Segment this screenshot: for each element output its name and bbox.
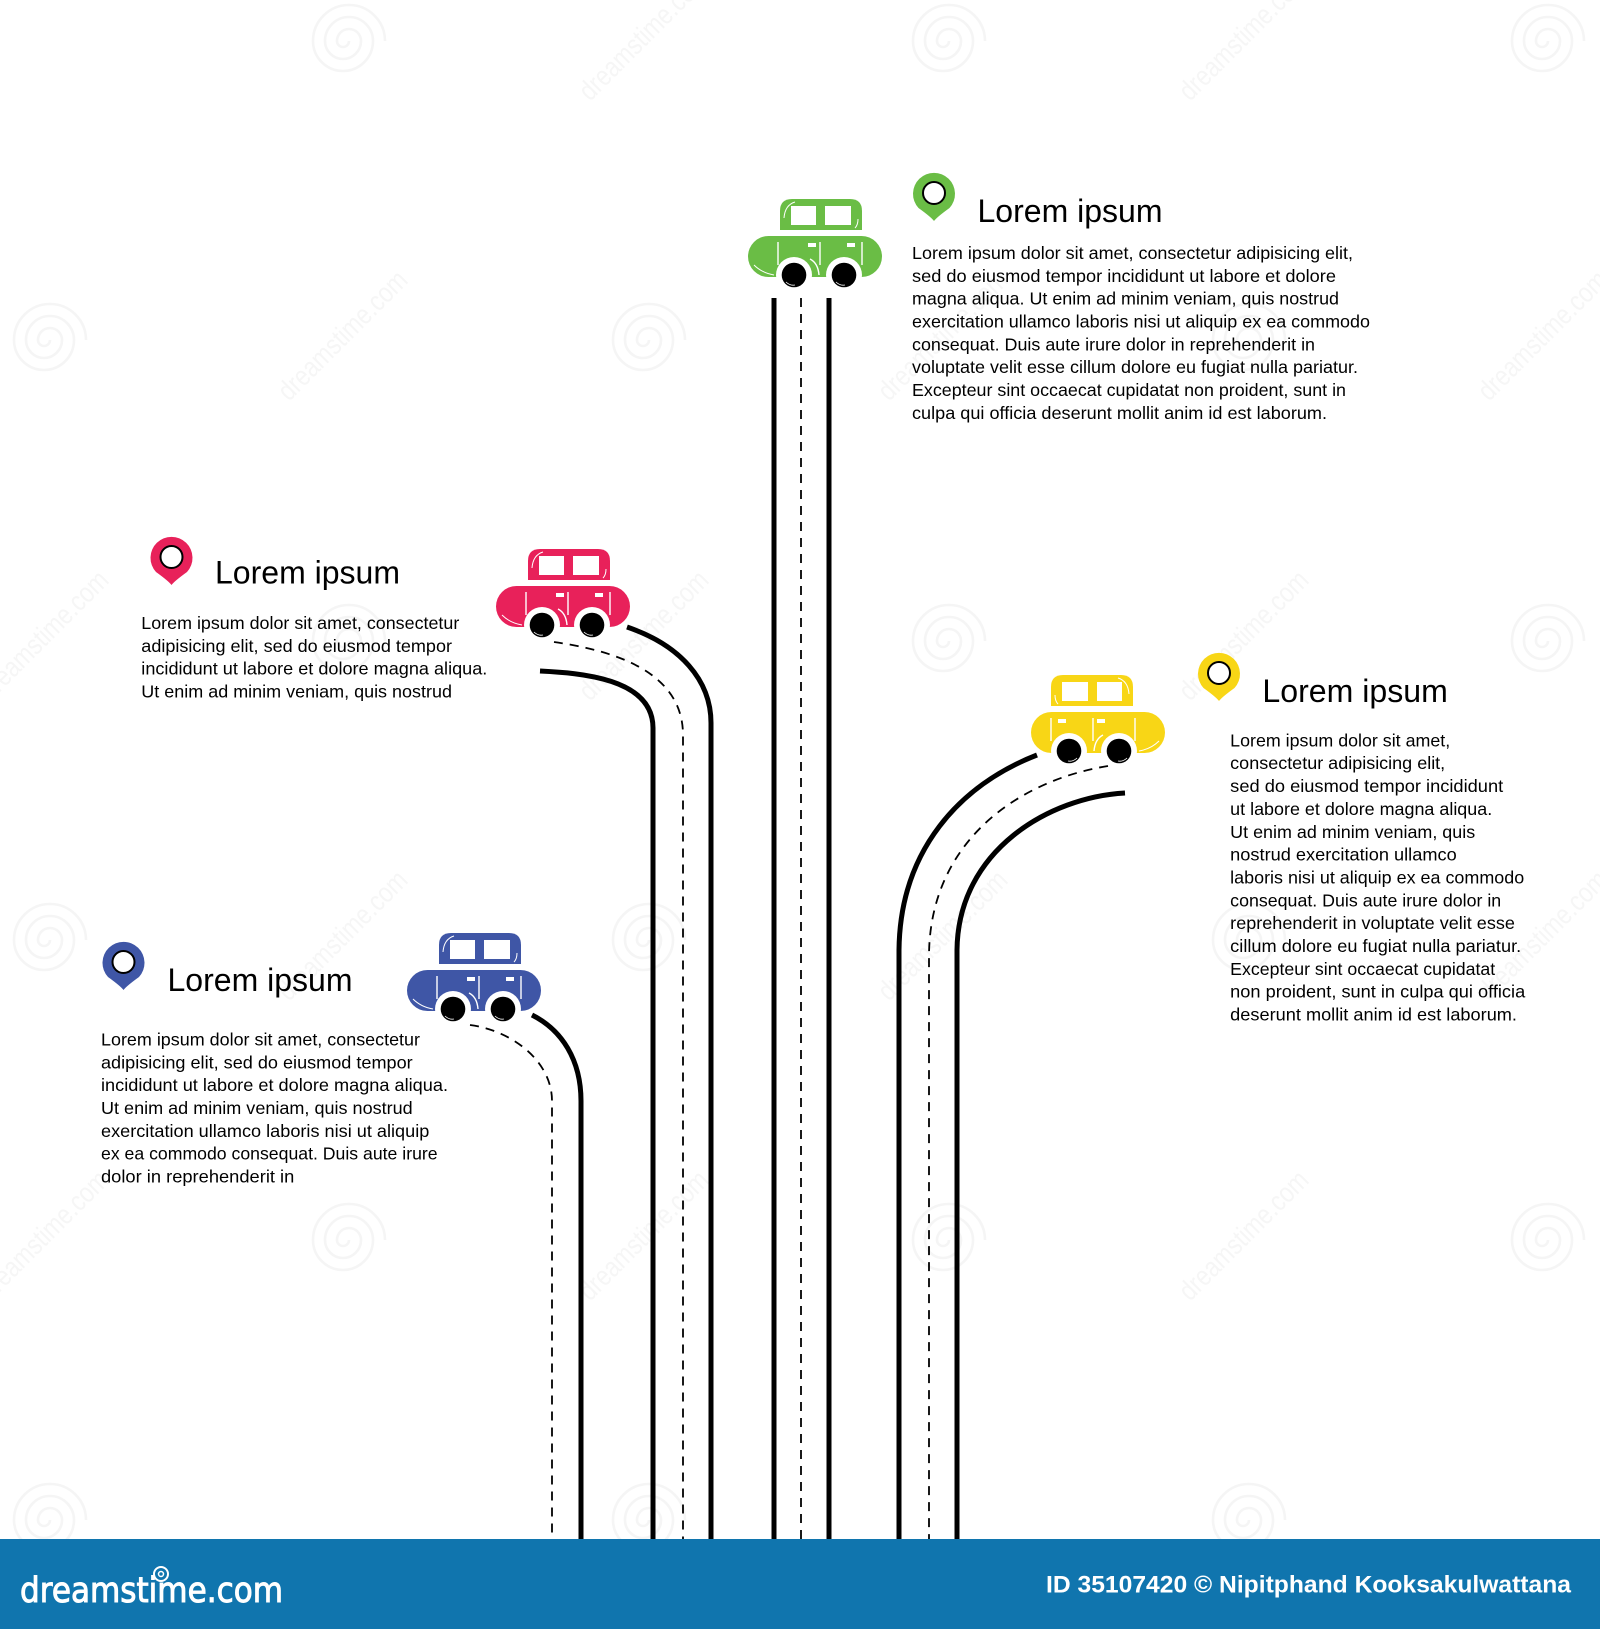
panel: green text block: [912, 173, 1370, 423]
logo: dreamstime.com: dreamstime.com: [20, 1571, 283, 1611]
icon: yellow map pin: [1198, 653, 1240, 701]
heading: blue: Lorem ipsum: [168, 962, 352, 998]
road: green centre branch: [774, 298, 829, 1539]
text block: green: [912, 243, 1370, 423]
image credit: ID 35107420 © Nipitphand Kooksakulwattana: [1046, 1572, 1571, 1598]
text block: yellow: Ut enim ad minim veniam, quis: [1230, 822, 1475, 842]
panel: yellow text block: [1198, 653, 1525, 1025]
road: yellow branch: [899, 755, 1125, 1539]
panel: blue text block: [101, 942, 448, 1187]
text block: green: sed do eiusmod tempor incididunt ut labore et dolore: [912, 266, 1336, 286]
text block: green: exercitation ullamco laboris nisi ut aliquip ex ea commodo: [912, 312, 1370, 332]
text block: yellow: nostrud exercitation ullamco: [1230, 845, 1457, 865]
text block: yellow: cillum dolore eu fugiat nulla pariatur.: [1230, 936, 1521, 956]
text block: yellow: consequat. Duis aute irure dolor in: [1230, 890, 1501, 910]
text block: red: adipisicing elit, sed do eiusmod tempor: [141, 636, 452, 656]
icon: blue map pin: [102, 942, 144, 990]
text block: yellow: Excepteur sint occaecat cupidatat: [1230, 959, 1495, 979]
icon: red map pin: [150, 537, 192, 585]
heading: green: Lorem ipsum: [978, 193, 1162, 229]
icon: green map pin: [913, 173, 955, 221]
text block: blue: Ut enim ad minim veniam, quis nostrud: [101, 1098, 413, 1118]
text block: blue: [101, 1030, 448, 1187]
car: red: [496, 549, 630, 643]
text: dreamstime.com: [1172, 564, 1314, 706]
text block: green: voluptate velit esse cillum dolore eu fugiat nulla pariatur.: [912, 357, 1358, 377]
text block: red: [141, 613, 487, 702]
text block: blue: exercitation ullamco laboris nisi ut aliquip: [101, 1121, 429, 1141]
footer banner: [0, 1539, 1600, 1629]
car: yellow: [1031, 675, 1165, 769]
heading: red: Lorem ipsum: [215, 554, 400, 590]
text: dreamstime.com: [871, 264, 1013, 406]
text block: yellow: deserunt mollit anim id est laborum.: [1230, 1005, 1517, 1025]
text block: green: Lorem ipsum dolor sit amet, consectetur adipisicing elit,: [912, 243, 1353, 263]
text block: blue: incididunt ut labore et dolore magna aliqua.: [101, 1075, 448, 1095]
text block: green: magna aliqua. Ut enim ad minim veniam, quis nostrud: [912, 289, 1339, 309]
text block: yellow: reprehenderit in voluptate velit esse: [1230, 913, 1515, 933]
text: dreamstime.com: [871, 864, 1013, 1006]
text block: blue: ex ea commodo consequat. Duis aute irure: [101, 1144, 438, 1164]
text: dreamstime.com: [1172, 1164, 1314, 1306]
text block: yellow: Lorem ipsum dolor sit amet,: [1230, 730, 1450, 750]
text block: green: Excepteur sint occaecat cupidatat non proident, sunt in: [912, 380, 1346, 400]
text block: red: Lorem ipsum dolor sit amet, consectetur: [141, 613, 459, 633]
text: dreamstime.com: [572, 564, 714, 706]
car: green: [748, 199, 882, 293]
car: blue: [407, 933, 541, 1027]
text block: red: Ut enim ad minim veniam, quis nostrud: [141, 682, 452, 702]
text block: yellow: sed do eiusmod tempor incididunt: [1230, 776, 1503, 796]
road: red branch: [540, 627, 711, 1539]
text: dreamstime.com: [271, 264, 413, 406]
text block: red: incididunt ut labore et dolore magna aliqua.: [141, 659, 487, 679]
panel: red text block: [141, 537, 487, 702]
text block: green: culpa qui officia deserunt mollit anim id est laborum.: [912, 403, 1327, 423]
text block: green: consequat. Duis aute irure dolor in reprehenderit in: [912, 334, 1315, 354]
text: dreamstime.com: [572, 1164, 714, 1306]
text block: yellow: non proident, sunt in culpa qui officia: [1230, 982, 1525, 1002]
text block: blue: Lorem ipsum dolor sit amet, consectetur: [101, 1030, 420, 1050]
text block: yellow: consectetur adipisicing elit,: [1230, 753, 1445, 773]
text: dreamstime.com: [271, 864, 413, 1006]
road: blue branch: [470, 1015, 581, 1539]
text block: yellow: laboris nisi ut aliquip ex ea commodo: [1230, 868, 1524, 888]
text block: blue: dolor in reprehenderit in: [101, 1167, 294, 1187]
heading: yellow: Lorem ipsum: [1262, 673, 1448, 709]
text block: blue: adipisicing elit, sed do eiusmod tempor: [101, 1052, 413, 1072]
text block: yellow: [1230, 730, 1525, 1025]
text block: yellow: ut labore et dolore magna aliqua.: [1230, 799, 1492, 819]
